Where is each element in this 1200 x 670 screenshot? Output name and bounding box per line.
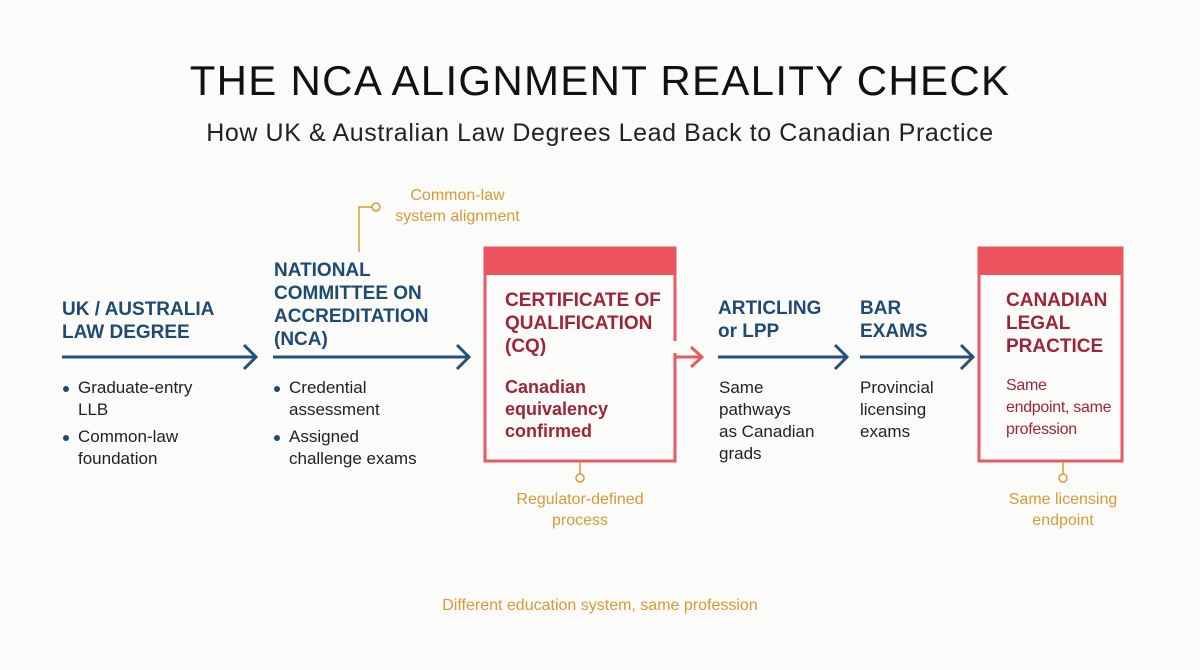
step 2 bullets: assessment <box>289 400 380 419</box>
step 6: PRACTICE <box>1006 336 1103 357</box>
step 6: LEGAL <box>1006 313 1070 334</box>
step 2 bullets: Credential <box>289 378 366 397</box>
step 4 text: Same <box>719 378 763 397</box>
step 1: UK / AUSTRALIA <box>62 299 214 320</box>
step 1 <box>62 299 214 343</box>
annotation: regulator: Regulator-defined <box>516 491 644 508</box>
step 2 bullets: Assigned <box>289 427 359 446</box>
step 6: endpoint, same <box>1006 399 1111 416</box>
annotation: endpoint: endpoint <box>1032 512 1094 529</box>
step 2 bullets <box>274 378 417 468</box>
step 1 bullets: Common-law <box>78 427 178 446</box>
step 3 CQ: confirmed <box>505 421 592 441</box>
step 3 CQ: Canadian <box>505 377 586 397</box>
step 5: BAR <box>860 298 901 319</box>
annotation: endpoint: Same licensing <box>1009 491 1117 508</box>
step 6: profession <box>1006 421 1077 438</box>
step 1: LAW DEGREE <box>62 322 190 343</box>
step 1 bullets: foundation <box>78 449 157 468</box>
step 4 text <box>719 378 814 463</box>
step 2: NATIONAL <box>274 260 371 281</box>
step 2 <box>274 260 428 350</box>
step 1 bullets: Graduate-entry <box>78 378 192 397</box>
step 3 CQ: CERTIFICATE OF <box>505 290 661 311</box>
annotation: common-law <box>395 187 520 225</box>
step 5 text: exams <box>860 422 910 441</box>
step 2: (NCA) <box>274 329 328 350</box>
step 5 text: Provincial <box>860 378 934 397</box>
annotation: common-law: Common-law <box>410 187 505 204</box>
step 6: CANADIAN <box>1006 290 1107 311</box>
annotation: regulator: process <box>552 512 608 529</box>
step 5 text <box>860 378 934 441</box>
annotation: regulator <box>516 491 644 529</box>
annotation: common-law: system alignment <box>395 208 520 225</box>
step 6: Same <box>1006 377 1047 394</box>
step 6 <box>1006 290 1111 438</box>
step 4 text: grads <box>719 444 762 463</box>
step 4: ARTICLING <box>718 298 821 319</box>
step 4 <box>718 298 821 342</box>
step 3 CQ <box>505 290 661 441</box>
step 4 text: pathways <box>719 400 791 419</box>
annotation: endpoint <box>1009 491 1117 529</box>
step 5 <box>860 298 928 342</box>
title: THE NCA ALIGNMENT REALITY CHECK <box>190 57 1010 104</box>
step 1 bullets <box>63 378 192 468</box>
step 2 bullets: challenge exams <box>289 449 417 468</box>
step 4 text: as Canadian <box>719 422 814 441</box>
step 5 text: licensing <box>860 400 926 419</box>
subtitle: How UK & Australian Law Degrees Lead Back to Canadian Practice <box>206 119 994 147</box>
step 3 CQ: equivalency <box>505 399 608 419</box>
step 5: EXAMS <box>860 321 928 342</box>
step 2: ACCREDITATION <box>274 306 428 327</box>
step 2: COMMITTEE ON <box>274 283 422 304</box>
step 4: or LPP <box>718 321 779 342</box>
footer note: Different education system, same profession <box>442 597 758 614</box>
step 1 bullets: LLB <box>78 400 108 419</box>
step 3 CQ: QUALIFICATION <box>505 313 652 334</box>
step 3 CQ: (CQ) <box>505 336 546 357</box>
